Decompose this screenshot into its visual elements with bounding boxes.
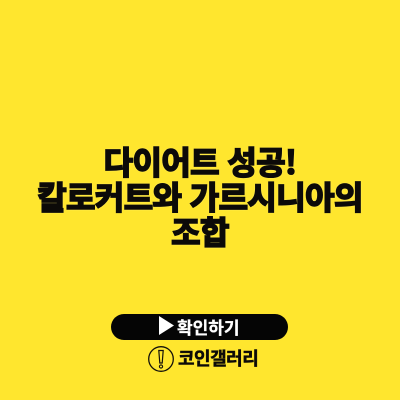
title: 조합: [171, 208, 229, 254]
button: confirm: [111, 314, 288, 340]
icon: exclamation circle: [148, 346, 174, 372]
brand name: 코인갤러리: [178, 345, 258, 371]
title: [37, 138, 363, 254]
icon: play triangle: [159, 316, 174, 335]
title: 다이어트 성공!: [104, 138, 296, 184]
button label: 확인하기: [177, 314, 240, 339]
title: 칼로커트와 가르시니아의: [37, 173, 363, 219]
brand logo: [148, 345, 258, 372]
